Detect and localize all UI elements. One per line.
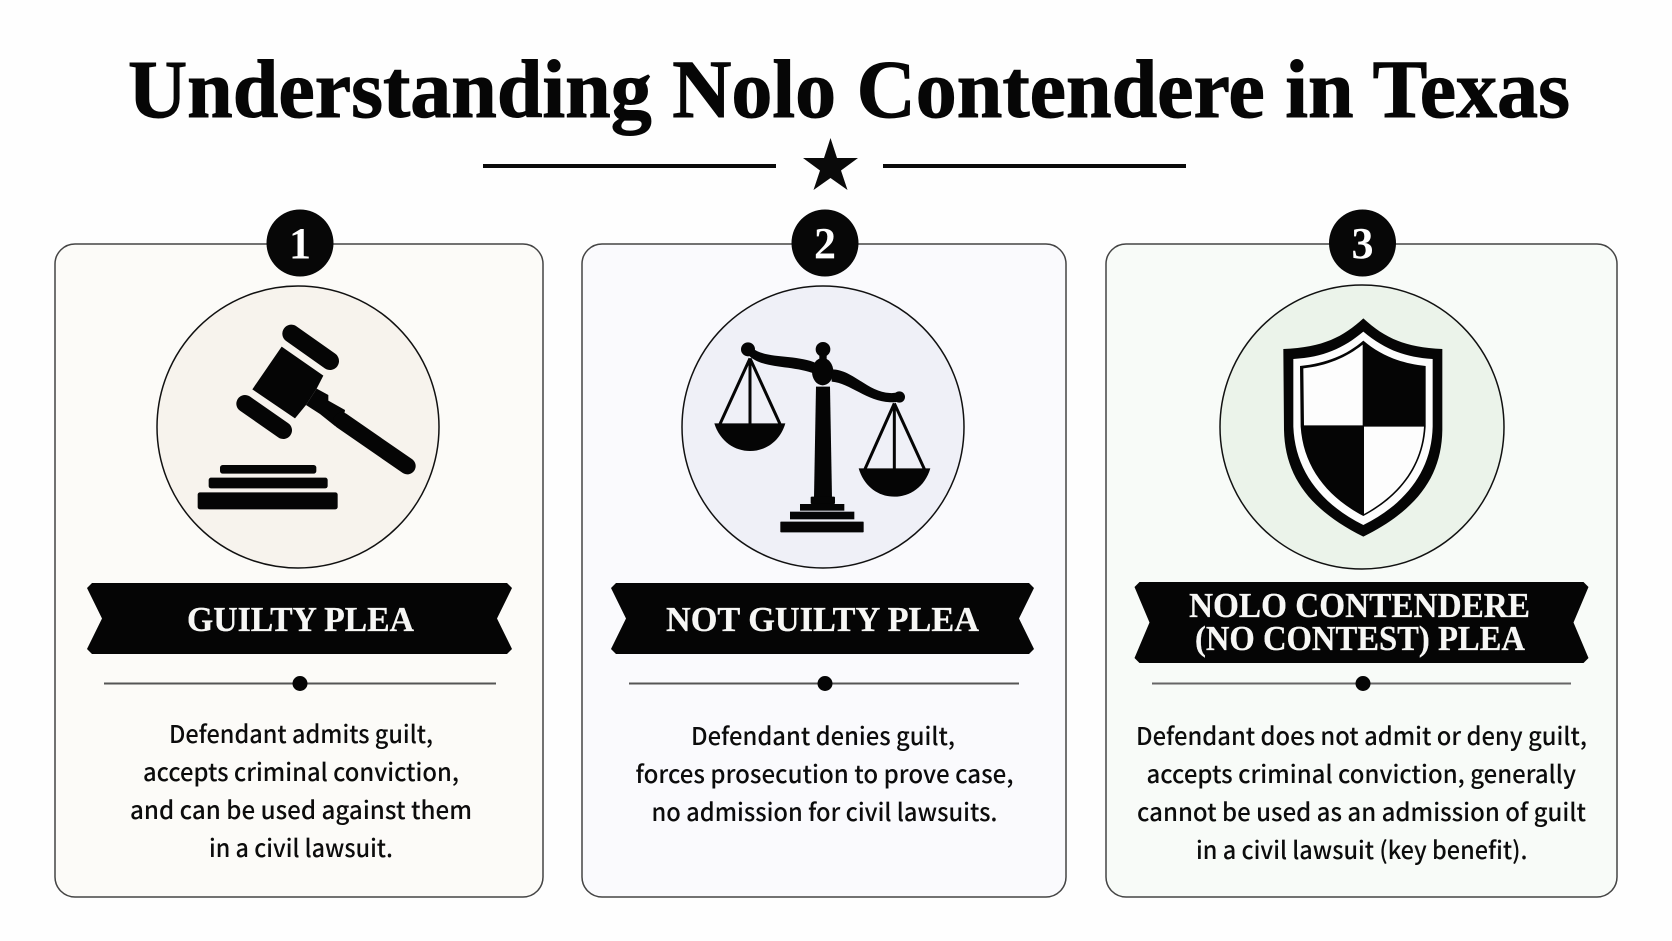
description text: in a civil lawsuit (key benefit). bbox=[1196, 832, 1528, 867]
panel: not guilty plea bbox=[582, 210, 1066, 897]
description text: cannot be used as an admission of guilt bbox=[1137, 794, 1586, 829]
divider bbox=[1152, 676, 1571, 691]
title ornament: lines and star bbox=[483, 138, 1186, 190]
icon: shield bbox=[1283, 318, 1442, 537]
description text: forces prosecution to prove case, bbox=[636, 756, 1014, 791]
icon circle bbox=[157, 286, 439, 568]
heading ribbon bbox=[87, 583, 512, 654]
number badge 1 bbox=[266, 210, 334, 276]
divider bbox=[629, 676, 1019, 691]
panel: nolo contendere plea bbox=[1106, 210, 1617, 897]
icon circle bbox=[682, 286, 964, 568]
icon: scales of justice bbox=[714, 342, 930, 532]
number badge 3 bbox=[1329, 210, 1396, 276]
card background bbox=[55, 244, 543, 897]
description text bbox=[1136, 718, 1587, 867]
card background bbox=[1106, 244, 1617, 897]
number badge 1: 1 bbox=[289, 219, 311, 268]
description text: accepts criminal conviction, generally bbox=[1146, 756, 1576, 791]
description text: in a civil lawsuit. bbox=[209, 830, 393, 865]
heading ribbon: GUILTY PLEA bbox=[187, 600, 415, 639]
number badge 2: 2 bbox=[814, 219, 836, 268]
description text: Defendant admits guilt, bbox=[169, 716, 433, 751]
icon: gavel bbox=[198, 334, 407, 509]
card background bbox=[582, 244, 1066, 897]
heading ribbon bbox=[1134, 582, 1588, 663]
number badge 3: 3 bbox=[1352, 219, 1374, 268]
icon circle bbox=[1220, 285, 1504, 569]
panel: guilty plea bbox=[55, 210, 543, 897]
title: Understanding Nolo Contendere in Texas bbox=[128, 43, 1570, 135]
description text bbox=[130, 716, 472, 865]
description text: Defendant denies guilt, bbox=[691, 718, 955, 753]
heading ribbon: NOT GUILTY PLEA bbox=[666, 600, 980, 639]
divider bbox=[104, 676, 496, 691]
description text bbox=[636, 718, 1014, 829]
description text: and can be used against them bbox=[130, 792, 472, 827]
description text: Defendant does not admit or deny guilt, bbox=[1136, 718, 1587, 753]
description text: accepts criminal conviction, bbox=[143, 754, 459, 789]
description text: no admission for civil lawsuits. bbox=[652, 794, 998, 829]
heading ribbon: (NO CONTEST) PLEA bbox=[1195, 619, 1526, 658]
heading ribbon: NOLO CONTENDERE bbox=[1189, 586, 1530, 625]
heading ribbon bbox=[611, 583, 1034, 654]
number badge 2 bbox=[792, 210, 858, 276]
